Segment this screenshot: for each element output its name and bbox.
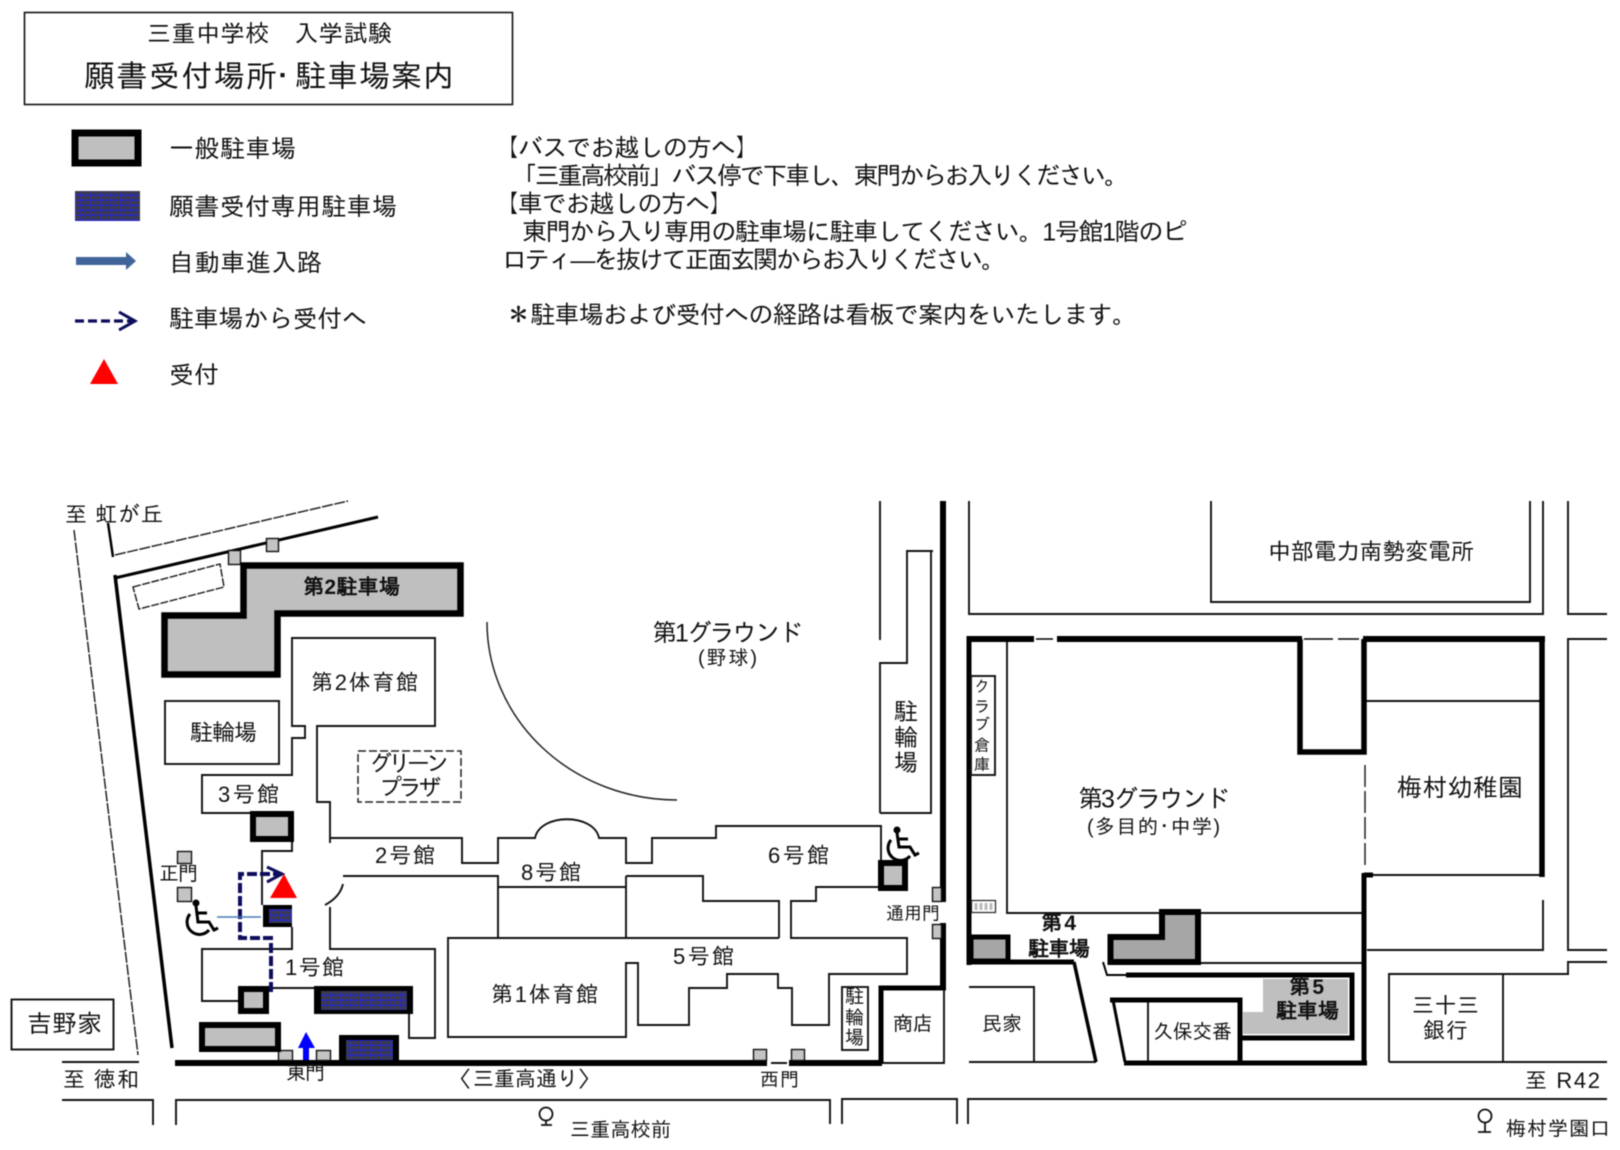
application parking near entrance	[263, 905, 292, 927]
dashed lines: road edges and field arc	[74, 501, 1365, 1055]
legend: general parking: 一般駐車場	[169, 136, 296, 164]
Yoshinoya box: 吉野家	[27, 1011, 102, 1039]
title box: ・	[267, 59, 298, 94]
second parking lot	[164, 566, 460, 674]
school boundary walls	[108, 501, 1545, 1065]
legend: general parking	[75, 133, 296, 164]
map label: gym 2: 第2体育館	[311, 670, 418, 695]
club storage box: ク	[974, 679, 990, 696]
small bicycle parking box: 駐	[845, 987, 864, 1008]
map label: Mie High street	[449, 1067, 600, 1092]
map label: building 6: 6号館	[768, 843, 829, 868]
map label: bank	[1412, 993, 1479, 1043]
map label: to Tokuwa: 至 徳和	[63, 1067, 139, 1092]
roads and neighbouring plots	[62, 501, 1607, 1125]
school building outlines	[202, 638, 907, 1038]
map label: police box: 久保交番	[1153, 1022, 1232, 1044]
blue entry line	[217, 916, 261, 918]
map label: building 3: 3号館	[218, 782, 279, 807]
map label: to R42: 至 R42	[1525, 1068, 1600, 1093]
fifth parking lot: 第5	[1289, 975, 1324, 999]
application parking beside east gate	[339, 1035, 399, 1061]
legend: walking route arrow	[75, 306, 367, 334]
map label: Mie High street: 三重高通り	[473, 1068, 578, 1091]
small bicycle parking box: 輪	[845, 1007, 864, 1029]
application parking north of east gate	[314, 986, 413, 1014]
legend: reception triangle	[90, 359, 219, 390]
map label: ground 3: (多目的･中学)	[1087, 817, 1220, 839]
campus map	[12, 501, 1610, 1142]
fourth parking lot: 駐車場	[1028, 937, 1090, 961]
map label: shop: 商店	[893, 1014, 933, 1036]
fifth parking lot	[1243, 975, 1348, 1034]
general parking near building 3	[253, 814, 291, 839]
map label: ground 3	[1078, 786, 1230, 839]
map label: green plaza	[369, 751, 449, 801]
walking route from parking to reception	[240, 867, 282, 992]
legend: application parking	[75, 191, 397, 222]
entry arrow at east gate	[298, 1032, 315, 1060]
icon: wheelchair west	[187, 900, 218, 934]
club storage box: ラ	[974, 699, 990, 716]
map label: main gate: 正門	[159, 864, 198, 886]
map label: building 2: 2号館	[375, 843, 435, 868]
title box	[24, 12, 512, 104]
title box: 駐車場案内	[295, 59, 454, 94]
map label: ground 1: 第1グラウンド	[652, 620, 803, 648]
map label: building 8: 8号館	[521, 860, 581, 885]
map label: green plaza: グリーン	[369, 751, 449, 777]
fourth parking lot	[971, 911, 1198, 962]
map label: bus stop name Umemura: 梅村学園口	[1506, 1118, 1610, 1141]
small bicycle parking box	[842, 987, 868, 1050]
map label: to Nijigaoka: 至 虹が丘	[65, 502, 163, 527]
small bicycle parking box: 場	[845, 1028, 864, 1049]
legend: vehicle entry arrow	[76, 250, 322, 278]
map label: substation: 中部電力南勢変電所	[1268, 539, 1474, 565]
map label: bicycle parking vertical: 場	[894, 750, 918, 777]
map label: green plaza: プラザ	[379, 775, 441, 801]
map label: building 5: 5号館	[673, 944, 734, 969]
directions text	[494, 135, 1187, 330]
club storage box: 倉	[974, 738, 990, 755]
directions text: 【バスでお越しの方へ】	[494, 135, 760, 163]
Yoshinoya box	[12, 1000, 114, 1050]
map label: Mie High street: 〈	[449, 1067, 471, 1092]
map label: west gate: 西門	[760, 1070, 799, 1091]
club storage box: 庫	[974, 757, 990, 774]
title box: 願書受付場所	[84, 59, 277, 94]
map label: Mie High street: 〉	[578, 1067, 600, 1092]
directions text: ロティ―を抜けて正面玄関からお入りください。	[502, 247, 1006, 275]
reception triangle	[270, 874, 297, 898]
map label: east gate: 東門	[286, 1063, 325, 1085]
icon: bus stop Umemura	[1478, 1110, 1492, 1132]
legend: walking route arrow: 駐車場から受付へ	[169, 306, 367, 334]
directions text: 「三重高校前」バス停で下車し、東門からお入りください。	[512, 163, 1129, 191]
general parking near building 6	[881, 863, 905, 888]
map label: ground 3: 第3グラウンド	[1078, 786, 1230, 814]
map label: bank: 銀行	[1423, 1018, 1468, 1043]
title box: 三重中学校 入学試験	[147, 21, 392, 48]
fifth parking lot: 駐車場	[1276, 999, 1339, 1023]
directions text: 東門から入り専用の駐車場に駐車してください。1号館1階のピ	[522, 219, 1187, 247]
fourth parking lot: 第4	[1041, 911, 1076, 935]
icon: bus stop Mie High School	[540, 1108, 552, 1125]
legend	[75, 133, 397, 390]
map label: bank: 三十三	[1412, 993, 1479, 1018]
map label: bicycle parking vertical	[894, 699, 918, 777]
bicycle parking box left: 駐輪場	[190, 720, 257, 746]
map label: private house: 民家	[982, 1014, 1022, 1036]
map label: bicycle parking vertical: 駐	[894, 699, 918, 726]
directions text: ＊駐車場および受付への経路は看板で案内をいたします。	[506, 302, 1137, 330]
icon: wheelchair east	[888, 826, 919, 860]
bicycle parking box left	[165, 701, 279, 764]
directions text: 【車でお越しの方へ】	[494, 191, 734, 219]
map label: bicycle parking vertical: 輪	[894, 725, 918, 752]
general parking by east gate	[202, 1025, 278, 1049]
map label: building 1: 1号館	[285, 955, 344, 980]
legend: reception triangle: 受付	[169, 362, 219, 390]
map label: ground 1: (野球)	[698, 648, 757, 670]
club storage box	[971, 676, 995, 775]
map label: ground 1	[652, 620, 803, 670]
legend: application parking: 願書受付専用駐車場	[169, 194, 397, 222]
legend: vehicle entry arrow: 自動車進入路	[169, 250, 322, 278]
general parking near building 1	[241, 989, 266, 1011]
map label: gym 1: 第1体育館	[491, 982, 598, 1007]
gate posts	[178, 538, 942, 1060]
club storage box: ブ	[974, 716, 990, 734]
small striped shed	[972, 900, 996, 912]
map label: staff gate: 通用門	[886, 904, 940, 924]
map label: bus stop name Mie High School: 三重高校前	[570, 1120, 671, 1142]
map label: kindergarten: 梅村幼稚園	[1397, 775, 1523, 803]
second parking lot: 第2駐車場	[303, 575, 400, 599]
